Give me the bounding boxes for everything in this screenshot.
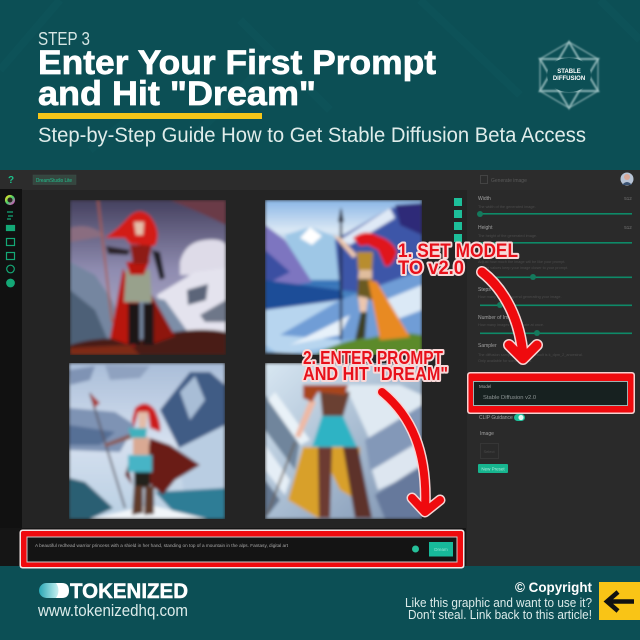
setting: width: 512: [624, 196, 632, 201]
callout text: enter prompt: [303, 348, 448, 384]
icon: Stable Diffusion logo: STABLE: [557, 69, 581, 75]
icon: yellow arrow badge: [599, 582, 640, 620]
copyright note: Don't steal. Link back to this article!: [408, 607, 592, 622]
setting: clip guidance: CLIP Guidance: [479, 415, 513, 421]
setting: number of images: [478, 315, 632, 336]
prompt text: A beautiful redhead warrior princess with a shield in her hand, standing on top of a mountain in the alps. Fantasy, digital art: [35, 543, 289, 548]
setting: cfg scale: Higher values keep your image closer to your prompt.: [478, 266, 568, 270]
setting: image: Image: [480, 431, 494, 437]
setting: width: Width: [478, 196, 491, 202]
search field: Generate image: [491, 178, 527, 184]
search field: [480, 176, 527, 184]
setting: number of images: Number of Images: [478, 315, 520, 321]
brand name: TOKENIZED: [70, 580, 188, 603]
badge: [33, 175, 76, 184]
icon: app logo: ?: [8, 175, 14, 186]
setting: height: The height of the generated image.: [478, 234, 537, 238]
panel: app screenshot: [0, 170, 640, 566]
callout text: set model: 1. SET MODEL: [398, 240, 518, 262]
title: [38, 44, 436, 113]
dream button: [429, 542, 453, 556]
setting: clip guidance: [479, 414, 525, 421]
icon: Stable Diffusion logo: DIFFUSION: [553, 76, 585, 82]
setting: sampler: [478, 343, 583, 363]
setting: width: The width of the generated image.: [478, 205, 536, 209]
setting: cfg scale: Adjust how much the image will be like your prompt.: [478, 260, 565, 264]
setting: sampler: Sampler: [478, 343, 497, 349]
info dot: [412, 546, 419, 552]
title: and Hit "Dream": [38, 75, 316, 113]
setting: steps: [478, 287, 632, 308]
header background: [0, 0, 640, 170]
setting: width: [477, 196, 632, 217]
copyright note: Like this graphic and want to use it?: [405, 595, 592, 610]
footer background: [0, 566, 640, 640]
header text block: [38, 29, 586, 147]
setting: number of images: How many images to generate at once.: [478, 323, 544, 327]
prompt bar background: [0, 528, 466, 566]
callout: prompt field highlight: [20, 530, 464, 568]
sidebar: [0, 189, 22, 566]
copyright note: © Copyright: [515, 579, 592, 595]
badge: DreamStudio Lite: [36, 178, 72, 184]
website: www.tokenizedhq.com: [37, 602, 188, 620]
panel: settings: [467, 190, 640, 566]
model value: Stable Diffusion v2.0: [483, 395, 536, 401]
setting: cfg scale: [478, 260, 632, 280]
setting: sampler: The diffusion sampling method. Default is k_dpm_2_ancestral.: [478, 353, 583, 357]
icon: colour ring: [6, 196, 14, 204]
callout text: enter prompt: AND HIT "DREAM": [303, 364, 448, 384]
icon: avatar: [620, 172, 634, 186]
image action buttons: [454, 198, 462, 242]
model label: Model: [479, 384, 491, 389]
generated image 4: [265, 363, 422, 519]
title: Enter Your First Prompt: [38, 44, 436, 82]
setting: height: 512: [624, 225, 632, 230]
setting: image: [480, 431, 498, 458]
callout text: enter prompt: 2. ENTER PROMPT: [303, 348, 443, 368]
button: advanced: New Preset: [481, 466, 505, 472]
setting: height: Height: [478, 225, 493, 231]
sidebar icons: [6, 212, 14, 287]
step label: STEP 3: [38, 29, 90, 49]
generated image 2: [265, 200, 422, 355]
setting: sampler: Only available for some models.: [478, 359, 532, 363]
setting: image: Select: [483, 449, 495, 454]
callout text: set model: TO v2.0: [398, 257, 464, 279]
brand block: [37, 580, 188, 620]
setting: steps: Steps: [478, 287, 491, 293]
setting: height: [478, 225, 632, 244]
copyright note: [405, 579, 592, 622]
yellow underline: [38, 113, 262, 119]
button: advanced: [478, 464, 508, 473]
callout: model field highlight: [467, 372, 635, 414]
arrow: to prompt field: [382, 392, 440, 512]
top bar: [0, 170, 640, 190]
generated image 1: [70, 200, 226, 355]
setting: steps: How many steps to spend generating your image.: [478, 295, 562, 299]
icon: tokenized mark: [39, 583, 69, 598]
arrow: to model field: [482, 272, 537, 359]
dream button: Dream: [434, 547, 448, 552]
subtitle: Step-by-Step Guide How to Get Stable Diffusion Beta Access: [38, 124, 586, 147]
icon: Stable Diffusion logo: [540, 42, 598, 108]
callout text: set model: [398, 240, 518, 279]
generated image 3: [69, 363, 225, 519]
